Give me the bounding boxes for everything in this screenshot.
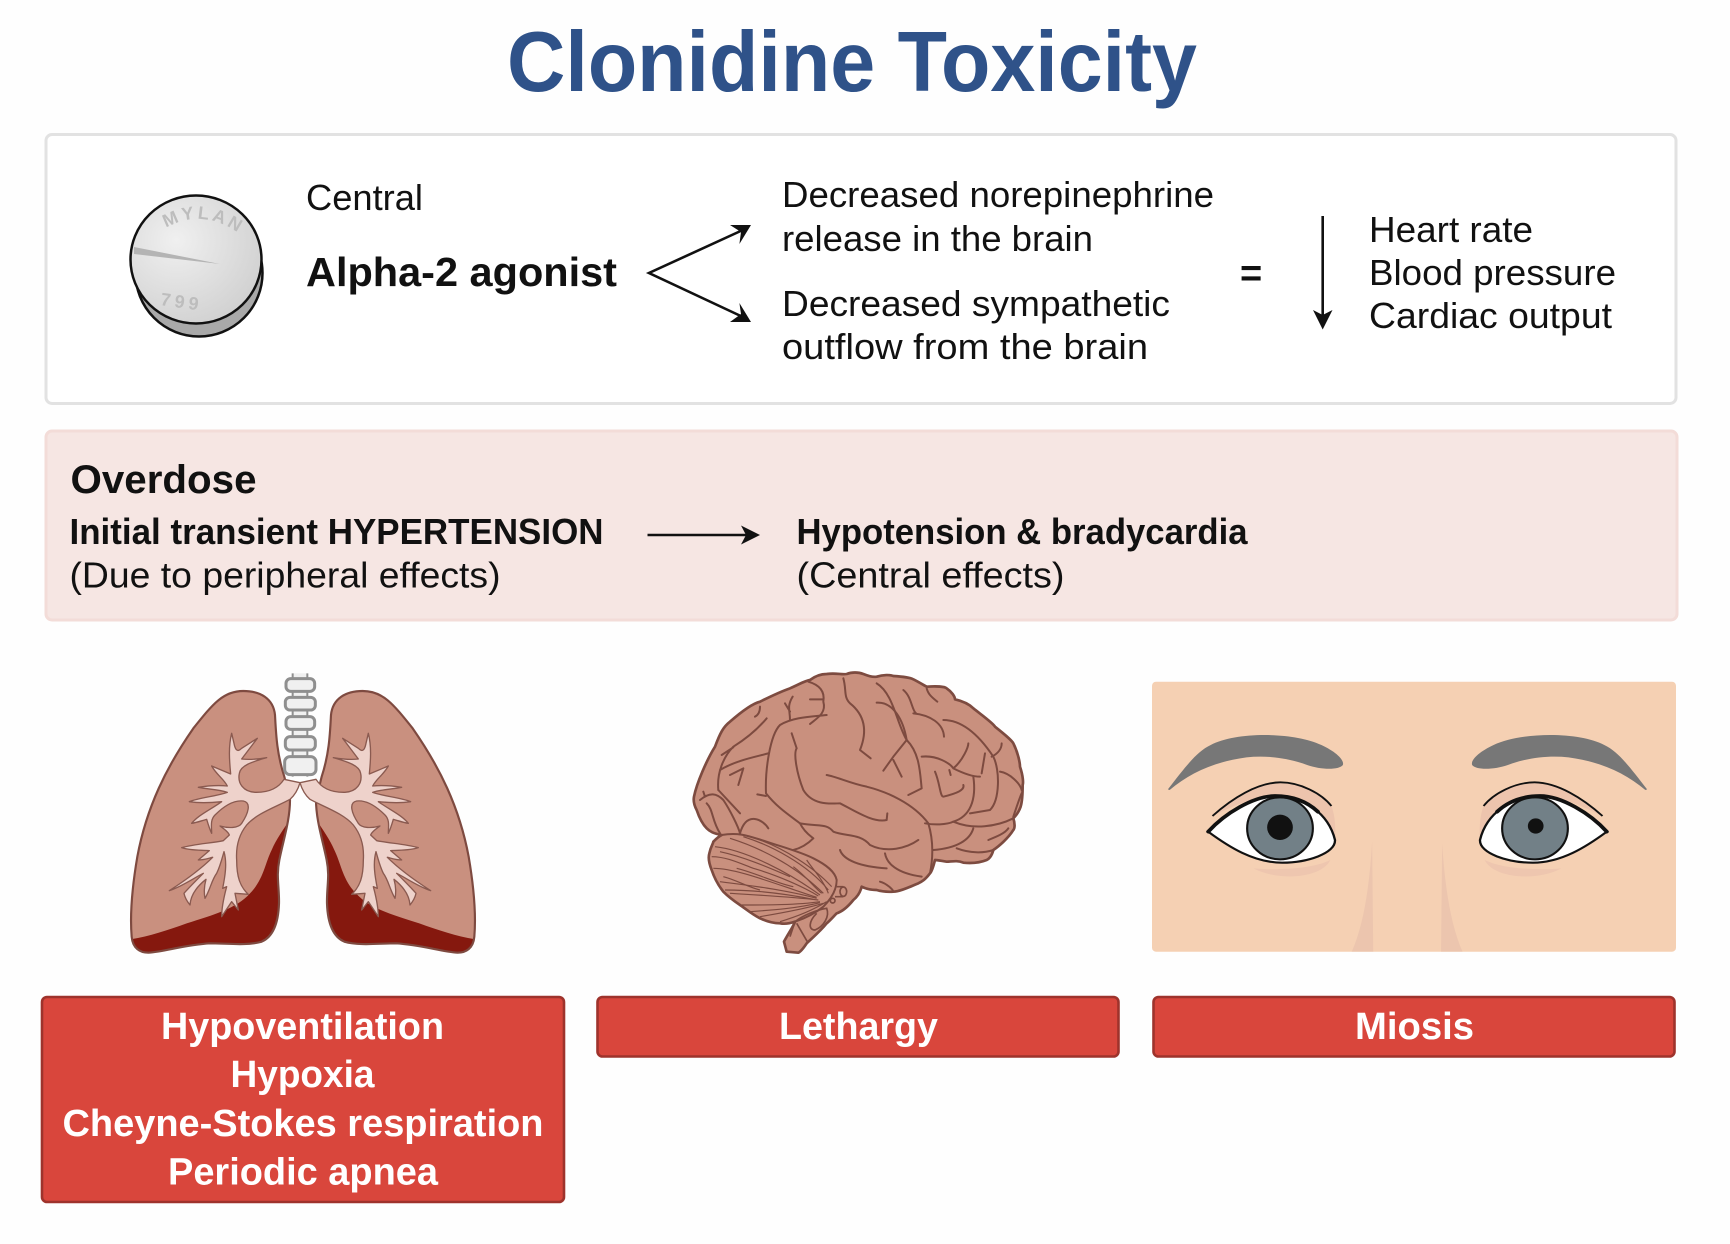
right lung [306,691,486,960]
text: hypotension and bradycardia [796,511,1248,596]
illustration: eyes [1152,682,1676,952]
callout: lethargy: Lethargy [779,1006,938,1048]
nose shading [1352,842,1462,952]
equals sign: = [1240,253,1262,295]
text: initial hypertension: (Due to peripheral effects) [70,554,500,596]
text: sympathetic outflow: Decreased sympathetic [782,283,1170,324]
icon: tablet: MYLAN [162,206,242,232]
panel: mechanism [44,133,1678,405]
left lung [120,691,300,960]
left eye [1208,782,1335,876]
icon: tablet: 799 [159,289,204,315]
sulci [700,678,1022,892]
text: norepinephrine: Decreased norepinephrine [782,174,1214,215]
callout: lethargy [598,997,1118,1056]
callout: respiratory effects [42,997,564,1202]
text: effects [1369,209,1616,336]
right eyebrow [1472,735,1647,790]
title: Clonidine Toxicity [507,15,1197,110]
text: effects: Cardiac output [1369,295,1612,336]
callout: respiratory effects: Hypoventilation [161,1006,444,1048]
text: effects: Blood pressure [1369,252,1616,293]
callout: miosis [1154,997,1674,1056]
text: effects: Heart rate [1369,209,1533,250]
text: norepinephrine: release in the brain [782,218,1093,259]
cerebellum [712,834,837,922]
icon: tablet [129,194,264,338]
callout: miosis: Miosis [1355,1006,1474,1048]
text: hypotension and bradycardia: Hypotension & bradycardia [796,511,1248,552]
icon: lungs [120,673,486,960]
brain stem details [790,887,847,942]
right eye [1480,782,1607,876]
panel: overdose [46,431,1677,620]
arrows: branching [649,225,751,322]
bronchial tree [169,733,431,917]
text: initial hypertension [70,511,604,596]
text: sympathetic outflow: outflow from the brain [782,326,1148,367]
text: initial hypertension: Initial transient HYPERTENSION [70,511,604,552]
label: central: Central [306,177,423,218]
callout: respiratory effects: Cheyne-Stokes respiration [62,1103,544,1145]
text: sympathetic outflow [782,283,1170,367]
text: hypotension and bradycardia: (Central effects) [796,554,1064,596]
left eyebrow [1168,735,1343,790]
arrow: right [648,526,760,544]
callout: respiratory effects: Hypoxia [230,1054,375,1096]
heading: overdose: Overdose [70,458,256,502]
text: norepinephrine [782,174,1214,259]
callout: respiratory effects: Periodic apnea [168,1152,439,1194]
arrow: down [1313,216,1332,330]
label: alpha-2 agonist: Alpha-2 agonist [306,249,617,295]
trachea [285,673,316,777]
icon: brain [694,672,1023,953]
